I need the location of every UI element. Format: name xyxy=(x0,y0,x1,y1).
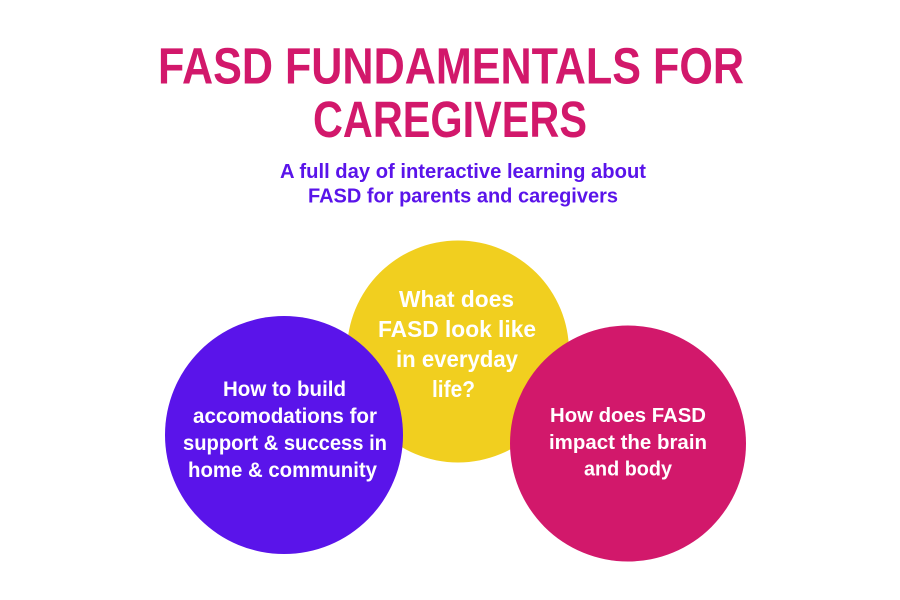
circle: brain and body: impact the brain xyxy=(549,431,707,454)
circle: brain and body: and body xyxy=(584,458,673,480)
circle: everyday life: in everyday xyxy=(396,346,518,372)
subtitle: A full day of interactive learning about xyxy=(280,160,646,183)
circle: accommodations: home & community xyxy=(188,459,377,482)
circle: everyday life: What does xyxy=(399,286,514,312)
circle: everyday life: life? xyxy=(432,376,475,402)
circle: brain and body xyxy=(510,326,746,562)
circle: accommodations: How to build xyxy=(223,378,346,401)
title xyxy=(158,38,744,148)
circle: brain and body: How does FASD xyxy=(550,404,706,427)
subtitle xyxy=(280,160,646,208)
title: FASD FUNDAMENTALS FOR xyxy=(158,38,744,94)
subtitle: FASD for parents and caregivers xyxy=(308,184,618,208)
circle: accommodations: accomodations for xyxy=(193,405,377,428)
circle: everyday life: FASD look like xyxy=(378,316,536,342)
circle: accommodations: support & success in xyxy=(183,432,387,455)
circle: accommodations xyxy=(165,316,403,554)
circle: everyday life xyxy=(347,240,569,462)
title: CAREGIVERS xyxy=(313,91,587,148)
